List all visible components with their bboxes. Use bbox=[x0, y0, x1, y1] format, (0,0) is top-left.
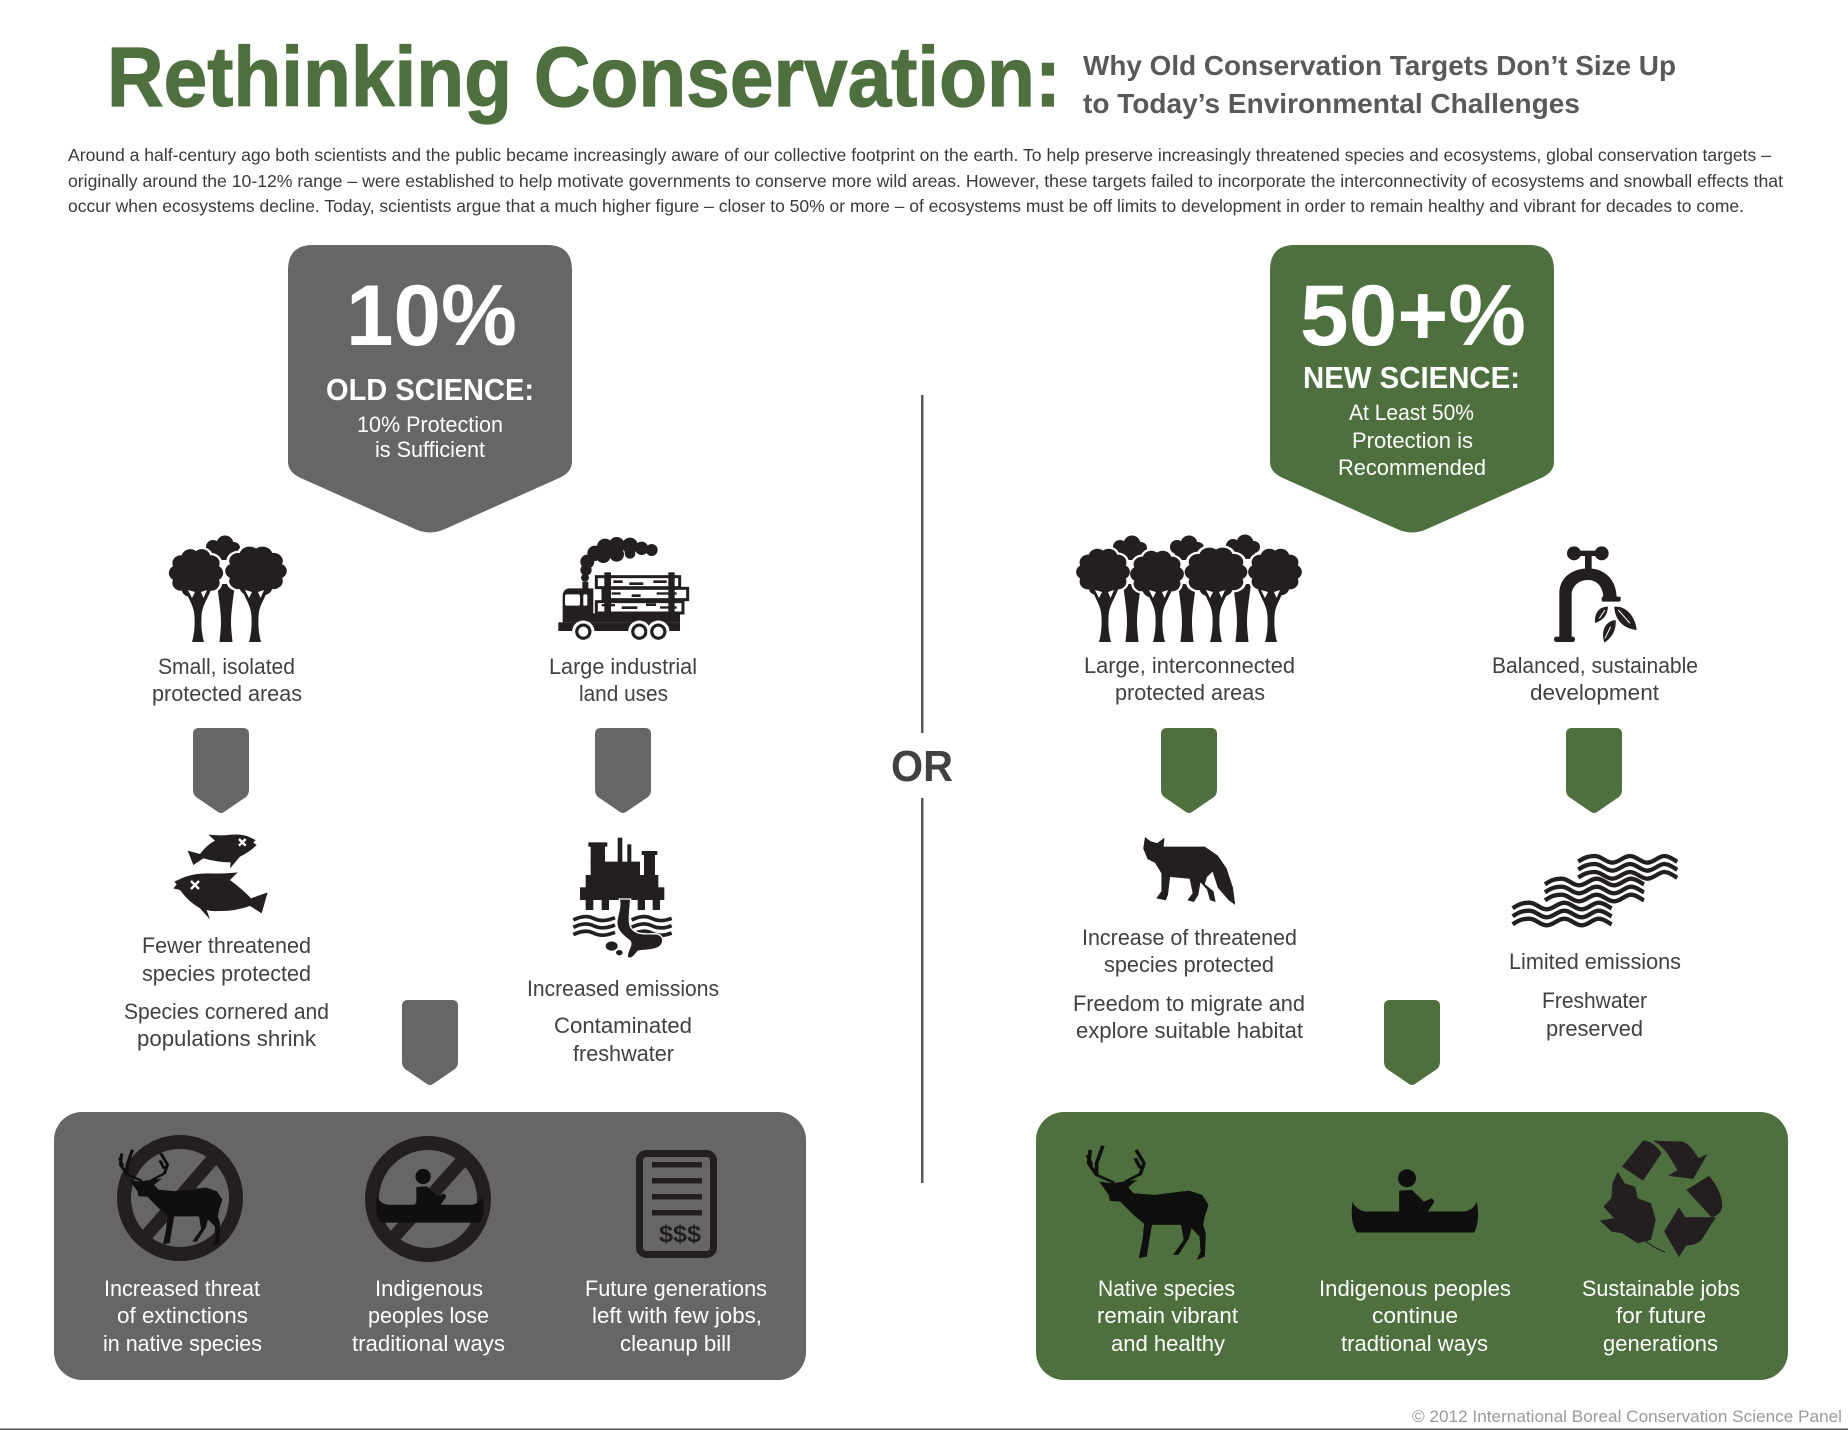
label: freedom to migrate: Freedom to migrate and bbox=[1073, 991, 1305, 1016]
label: species cornered: populations shrink bbox=[137, 1026, 317, 1051]
label: balanced development: Balanced, sustainable bbox=[1492, 653, 1698, 678]
label: contaminated freshwater: freshwater bbox=[573, 1041, 674, 1066]
label: sustainable jobs: Sustainable jobs bbox=[1582, 1276, 1740, 1301]
label: future generations bbox=[585, 1276, 767, 1356]
icon: fox bbox=[1143, 837, 1235, 905]
label: small isolated: protected areas bbox=[152, 681, 302, 706]
icon: oil rig spill bbox=[573, 838, 672, 958]
label: fewer threatened: species protected bbox=[142, 961, 311, 986]
label: sustainable jobs: generations bbox=[1603, 1331, 1718, 1356]
label: sustainable jobs bbox=[1582, 1276, 1740, 1356]
icon: faucet with leaves bbox=[1554, 546, 1637, 643]
label: fewer threatened: Fewer threatened bbox=[142, 933, 311, 958]
label: contaminated freshwater: Contaminated bbox=[554, 1013, 692, 1038]
arrow: industry to emissions bbox=[595, 728, 651, 813]
label: large industrial: land uses bbox=[579, 681, 668, 706]
label: future generations: Future generations bbox=[585, 1276, 767, 1301]
label: freshwater preserved: preserved bbox=[1546, 1016, 1643, 1041]
title: Rethinking Conservation: bbox=[107, 30, 1061, 124]
label: threat of extinctions: of extinctions bbox=[117, 1303, 248, 1328]
old science claim: is Sufficient bbox=[375, 437, 486, 462]
intro paragraph: occur when ecosystems decline. Today, scientists argue that a much higher figure – closer to 50% or more – of ecosystems must be off limits to development in order to remain healthy and vibrant for decades to come. bbox=[68, 196, 1744, 216]
old science percentage: 10% bbox=[346, 268, 517, 364]
label: large industrial: Large industrial bbox=[549, 654, 697, 679]
icon: large interconnected trees bbox=[1076, 534, 1302, 642]
label: limited emissions: Limited emissions bbox=[1509, 949, 1681, 974]
icon: cleanup bill bbox=[640, 1154, 714, 1254]
intro paragraph: Around a half-century ago both scientists and the public became increasingly aware of our collective footprint on the earth. To help preserve increasingly threatened species and ecosystems, global conservation targets – bbox=[68, 145, 1771, 165]
icon: deer bbox=[1088, 1146, 1208, 1260]
new science heading: NEW SCIENCE: bbox=[1303, 360, 1520, 395]
label: future generations: cleanup bill bbox=[620, 1331, 731, 1356]
label: contaminated freshwater bbox=[554, 1013, 692, 1066]
arrow: large areas to species bbox=[1161, 728, 1217, 813]
icon: recycling leaf bbox=[1600, 1141, 1722, 1257]
label: indigenous peoples lose: peoples lose bbox=[368, 1303, 489, 1328]
label: large interconnected: Large, interconnected bbox=[1084, 653, 1295, 678]
label: sustainable jobs: for future bbox=[1616, 1303, 1706, 1328]
label: threat of extinctions bbox=[103, 1276, 262, 1356]
label: small isolated bbox=[152, 654, 302, 706]
new science percentage: 50+% bbox=[1300, 268, 1526, 364]
label: fewer threatened bbox=[142, 933, 311, 986]
subtitle: Why Old Conservation Targets Don’t Size Up bbox=[1083, 50, 1676, 81]
label: indigenous peoples continue: Indigenous peoples bbox=[1319, 1276, 1511, 1301]
old science claim bbox=[357, 412, 503, 462]
label: native species: and healthy bbox=[1111, 1331, 1226, 1356]
arrow: small areas to fewer species bbox=[193, 728, 249, 813]
old science claim: 10% Protection bbox=[357, 412, 503, 437]
label: indigenous peoples lose: Indigenous bbox=[375, 1276, 483, 1301]
credit: © 2012 International Boreal Conservation Science Panel bbox=[1412, 1407, 1842, 1426]
label: small isolated: Small, isolated bbox=[158, 654, 295, 679]
label: freshwater preserved bbox=[1542, 988, 1647, 1041]
label: indigenous peoples continue bbox=[1319, 1276, 1511, 1356]
icon: no canoe bbox=[372, 1143, 484, 1255]
new science claim: Recommended bbox=[1338, 455, 1486, 480]
icon: dead fish bbox=[173, 835, 268, 919]
label: native species: Native species bbox=[1098, 1276, 1235, 1301]
intro paragraph bbox=[68, 145, 1783, 216]
icon: canoe bbox=[1352, 1169, 1478, 1233]
new science claim bbox=[1338, 400, 1486, 480]
panel: new science bbox=[1270, 245, 1554, 532]
label: large industrial bbox=[549, 654, 697, 706]
label: increase of threatened: Increase of threatened bbox=[1082, 925, 1297, 950]
label: freshwater preserved: Freshwater bbox=[1542, 988, 1647, 1013]
subtitle bbox=[1083, 50, 1676, 119]
label: freedom to migrate bbox=[1073, 991, 1305, 1043]
label: indigenous peoples continue: tradtional ways bbox=[1341, 1331, 1488, 1356]
label: native species bbox=[1097, 1276, 1239, 1356]
label: indigenous peoples lose bbox=[352, 1276, 505, 1356]
label: future generations: left with few jobs, bbox=[592, 1303, 762, 1328]
icon: cleanup bill: $$$ bbox=[659, 1221, 702, 1248]
subtitle: to Today’s Environmental Challenges bbox=[1083, 88, 1580, 119]
label: species cornered bbox=[124, 999, 329, 1051]
old science heading: OLD SCIENCE: bbox=[326, 372, 534, 407]
icon: small isolated trees bbox=[169, 536, 287, 642]
label: large interconnected: protected areas bbox=[1115, 680, 1265, 705]
label: increased emissions: Increased emissions bbox=[527, 976, 719, 1001]
label: balanced development bbox=[1492, 653, 1698, 705]
label: balanced development: development bbox=[1530, 680, 1660, 705]
intro paragraph: originally around the 10-12% range – were established to help motivate governments to conserve more wild areas. However, these targets failed to incorporate the interconnectivity of ecosystems and snowball effects that bbox=[68, 171, 1783, 191]
label: indigenous peoples continue: continue bbox=[1372, 1303, 1458, 1328]
label: indigenous peoples lose: traditional ways bbox=[352, 1331, 505, 1356]
icon: logging truck bbox=[558, 537, 688, 641]
label: increase of threatened: species protected bbox=[1104, 952, 1274, 977]
label: threat of extinctions: Increased threat bbox=[104, 1276, 261, 1301]
arrow: left column to outcomes bbox=[402, 1000, 458, 1085]
label: threat of extinctions: in native species bbox=[103, 1331, 262, 1356]
center divider with OR: OR bbox=[891, 742, 953, 791]
arrow: right column to outcomes bbox=[1384, 1000, 1440, 1085]
new science claim: At Least 50% bbox=[1349, 400, 1474, 425]
new science claim: Protection is bbox=[1352, 428, 1473, 453]
icon: no deer bbox=[119, 1142, 236, 1254]
label: large interconnected bbox=[1084, 653, 1295, 705]
label: native species: remain vibrant bbox=[1097, 1303, 1239, 1328]
arrow: development to emissions bbox=[1566, 728, 1622, 813]
panel: old science outcomes bbox=[54, 1112, 806, 1380]
label: freedom to migrate: explore suitable habitat bbox=[1076, 1018, 1304, 1043]
label: species cornered: Species cornered and bbox=[124, 999, 329, 1024]
icon: clean water waves bbox=[1513, 856, 1677, 925]
panel: old science bbox=[288, 245, 572, 532]
panel: new science outcomes bbox=[1036, 1112, 1788, 1380]
label: increase of threatened bbox=[1082, 925, 1297, 977]
